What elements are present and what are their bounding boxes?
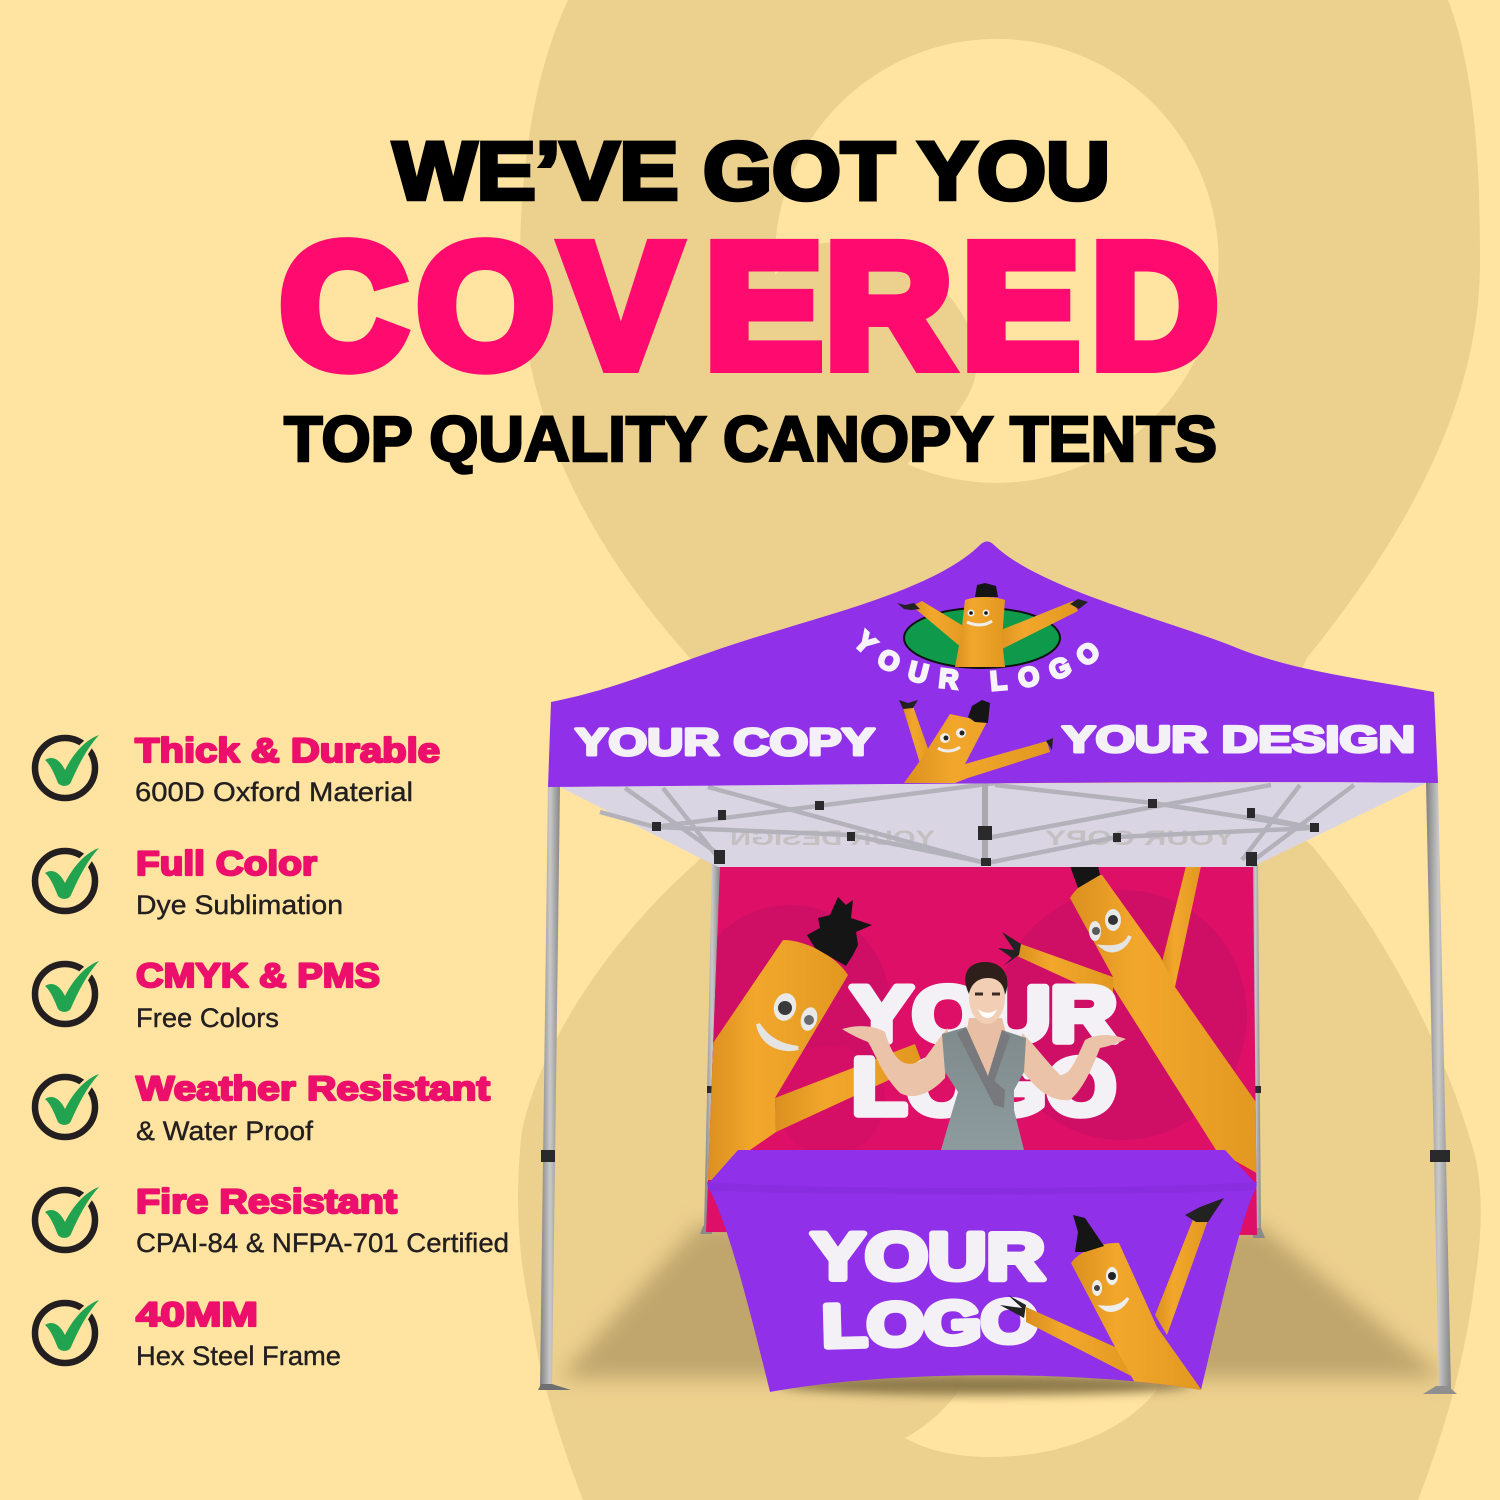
canopy underside	[556, 782, 1428, 867]
feature: full color	[35, 845, 343, 920]
backdrop logo text: YOUR	[851, 970, 1117, 1058]
table logo text: YOUR	[811, 1219, 1045, 1293]
table tube	[1000, 1198, 1224, 1392]
feature: thick and durable: Thick & Durable	[135, 732, 440, 770]
canopy frame struts	[600, 783, 1354, 866]
backdrop wall	[690, 866, 1260, 1235]
feature: 40mm	[35, 1296, 341, 1371]
valance design text: YOUR DESIGN	[1062, 719, 1415, 760]
feature: thick and durable	[35, 732, 440, 807]
feature: cmyk and pms: CMYK & PMS	[136, 957, 380, 995]
table logo text	[808, 1230, 1047, 1350]
feature: weather resistant: & Water Proof	[136, 1116, 314, 1146]
floor shadow	[560, 1225, 1445, 1395]
title: covered: COVERED	[280, 208, 1218, 404]
backdrop logo text	[848, 982, 1120, 1119]
feature list	[35, 732, 509, 1371]
canopy underside: YOUR DESIGN	[730, 827, 935, 850]
roof logo: YOUR LOGO	[856, 628, 1099, 692]
feature: 40mm: 40MM	[136, 1296, 258, 1334]
feature: fire resistant: CPAI-84 & NFPA-701 Certified	[136, 1228, 509, 1258]
canopy roof	[548, 542, 1438, 787]
backdrop tube right	[998, 866, 1260, 1175]
front right pole	[1423, 782, 1457, 1394]
feature: fire resistant: Fire Resistant	[136, 1183, 397, 1221]
feature: weather resistant	[35, 1070, 490, 1146]
person	[842, 962, 1126, 1150]
feature: cmyk and pms: Free Colors	[136, 1003, 279, 1033]
table logo text: LOGO	[821, 1287, 1039, 1360]
feature: thick and durable: 600D Oxford Material	[135, 777, 413, 807]
front left pole	[538, 785, 571, 1390]
feature: cmyk and pms	[35, 957, 380, 1033]
feature: fire resistant	[35, 1183, 509, 1258]
title: we've got you: WE’VE GOT YOU	[393, 126, 1110, 217]
rear poles	[700, 862, 1265, 1238]
feature: weather resistant: Weather Resistant	[136, 1070, 490, 1108]
feature: full color: Full Color	[136, 845, 317, 883]
canopy tent	[538, 542, 1457, 1394]
feature: 40mm: Hex Steel Frame	[136, 1341, 341, 1371]
valance tube	[899, 700, 1053, 783]
valance copy text: YOUR COPY	[575, 722, 875, 764]
printed table cover	[707, 1150, 1257, 1392]
backdrop tube left	[706, 897, 921, 1180]
subtitle: top quality canopy tents: TOP QUALITY CANOPY TENTS	[284, 403, 1217, 475]
roof logo	[856, 583, 1099, 692]
background figure eight shape	[518, 0, 1481, 1500]
feature: full color: Dye Sublimation	[136, 890, 343, 920]
backdrop logo text: LOGO	[852, 1042, 1116, 1131]
canopy underside: YOUR COPY	[1045, 827, 1235, 850]
